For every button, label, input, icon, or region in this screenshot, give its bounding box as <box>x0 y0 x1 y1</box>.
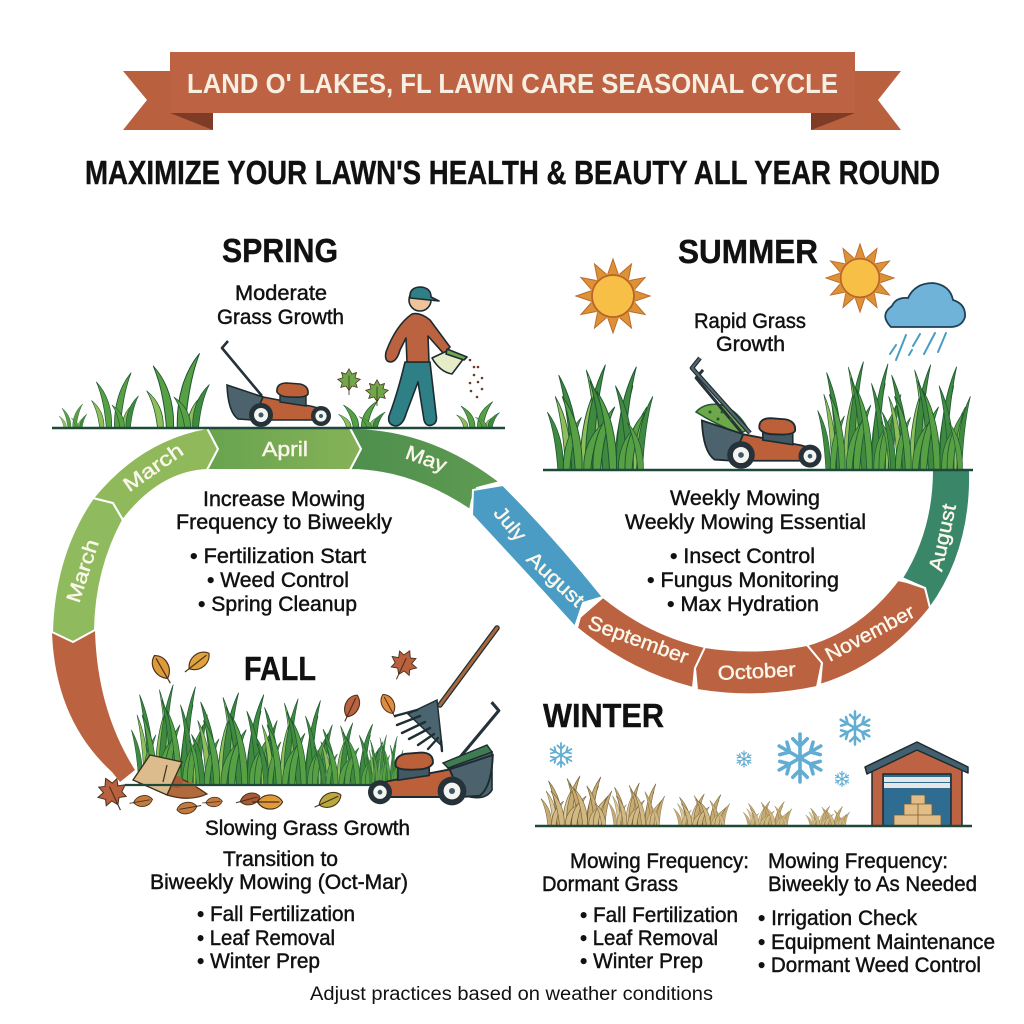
segment: April <box>207 428 361 470</box>
winter tasks right: • Dormant Weed Control <box>758 954 981 977</box>
summer tasks: Weekly Mowing Essential <box>625 511 866 534</box>
segment: September <box>577 597 705 688</box>
spring tasks: Frequency to Biweekly <box>176 511 393 534</box>
fall grass <box>131 685 403 785</box>
panel: summer <box>543 233 973 616</box>
heading: winter: WINTER <box>543 697 664 734</box>
spring tasks <box>176 488 393 616</box>
month labels <box>63 439 961 685</box>
title banner <box>123 52 901 130</box>
heading: summer: SUMMER <box>678 233 818 270</box>
spring tasks: • Fertilization Start <box>190 545 366 568</box>
month labels: July <box>489 503 530 546</box>
winter tasks right: • Equipment Maintenance <box>758 931 995 954</box>
icon: weeds <box>338 369 388 406</box>
segment: May <box>350 428 500 510</box>
spring tasks: Increase Mowing <box>203 488 365 511</box>
summer tasks: Weekly Mowing <box>670 487 820 510</box>
spring tasks: • Spring Cleanup <box>198 593 357 616</box>
summer growth note: Rapid Grass <box>694 310 806 333</box>
month labels: November <box>822 601 919 666</box>
summer growth note: Growth <box>716 333 785 356</box>
winter tasks left: • Winter Prep <box>580 950 703 973</box>
summer tasks: • Insect Control <box>670 545 815 568</box>
fall tasks: Slowing Grass Growth <box>205 817 410 840</box>
spring growth note: Grass Growth <box>217 306 344 329</box>
fall tasks <box>150 817 410 973</box>
winter tasks left <box>542 850 749 973</box>
winter tasks left: Mowing Frequency: <box>570 850 749 873</box>
month labels: August <box>522 548 589 612</box>
winter tasks right: Mowing Frequency: <box>768 850 948 873</box>
summer tasks <box>625 487 866 616</box>
fall tasks: • Leaf Removal <box>197 927 335 950</box>
month labels: March <box>63 537 104 605</box>
segment: August right <box>902 470 970 608</box>
icon: rake <box>395 628 497 751</box>
icon: leaf bag <box>133 755 207 798</box>
icon: gardener spreading fertilizer <box>386 287 467 426</box>
summer grass <box>548 362 970 470</box>
winter tasks left: • Leaf Removal <box>580 927 718 950</box>
panel: winter <box>535 697 995 977</box>
segment: fall ribbon <box>52 630 135 782</box>
winter tasks left: Dormant Grass <box>542 873 678 896</box>
summer tasks: • Fungus Monitoring <box>647 569 839 592</box>
icon: sun right <box>826 244 894 312</box>
winter tasks right <box>758 850 995 977</box>
title banner: LAND O' LAKES, FL LAWN CARE SEASONAL CYCLE <box>187 68 838 99</box>
segment: March upper <box>93 428 218 520</box>
fall tasks: Biweekly Mowing (Oct-Mar) <box>150 871 408 894</box>
panel: spring <box>52 232 505 616</box>
fall tasks: Transition to <box>223 848 338 871</box>
segment: July and August blue <box>472 485 603 627</box>
icon: rain cloud <box>885 283 965 360</box>
segment: November <box>807 580 930 685</box>
fall tasks: • Fall Fertilization <box>197 903 355 926</box>
month labels: August <box>925 502 961 573</box>
month labels: May <box>403 442 450 477</box>
spring tasks: • Weed Control <box>207 569 349 592</box>
icon: spring mower <box>222 341 331 427</box>
icon: storage garage <box>865 742 968 826</box>
icon: summer mower with clippings <box>692 358 822 469</box>
icon: ground leaves <box>92 772 344 816</box>
icon: falling leaves <box>148 645 422 724</box>
winter tasks left: • Fall Fertilization <box>580 904 738 927</box>
heading: fall: FALL <box>244 650 316 687</box>
month labels: April <box>262 439 308 461</box>
footer note: Adjust practices based on weather conditions <box>310 984 713 1005</box>
fertilizer granules <box>469 359 483 398</box>
winter tasks right: Biweekly to As Needed <box>768 873 977 896</box>
panel: fall <box>92 628 499 973</box>
spring ground line <box>52 427 505 429</box>
winter tasks right: • Irrigation Check <box>758 907 917 930</box>
segment: March lower <box>52 498 123 642</box>
fall ground line <box>125 784 375 786</box>
winter ground line <box>535 825 972 827</box>
icon: sun left <box>576 259 650 333</box>
spring growth note: Moderate <box>235 282 327 305</box>
spring growth note <box>217 282 344 329</box>
dormant grass <box>541 776 850 826</box>
spring grass <box>59 354 500 428</box>
segment: October <box>695 645 822 694</box>
seasonal ribbon <box>52 428 970 782</box>
icon: fall mower <box>368 702 499 805</box>
fall tasks: • Winter Prep <box>197 950 320 973</box>
month labels: October <box>717 659 797 685</box>
summer ground line <box>543 469 973 471</box>
summer tasks: • Max Hydration <box>667 593 819 616</box>
month labels: March <box>119 440 188 497</box>
month labels: September <box>585 612 691 669</box>
heading: spring: SPRING <box>222 232 338 269</box>
summer growth note <box>694 310 806 356</box>
icon: snowflakes <box>549 711 872 787</box>
